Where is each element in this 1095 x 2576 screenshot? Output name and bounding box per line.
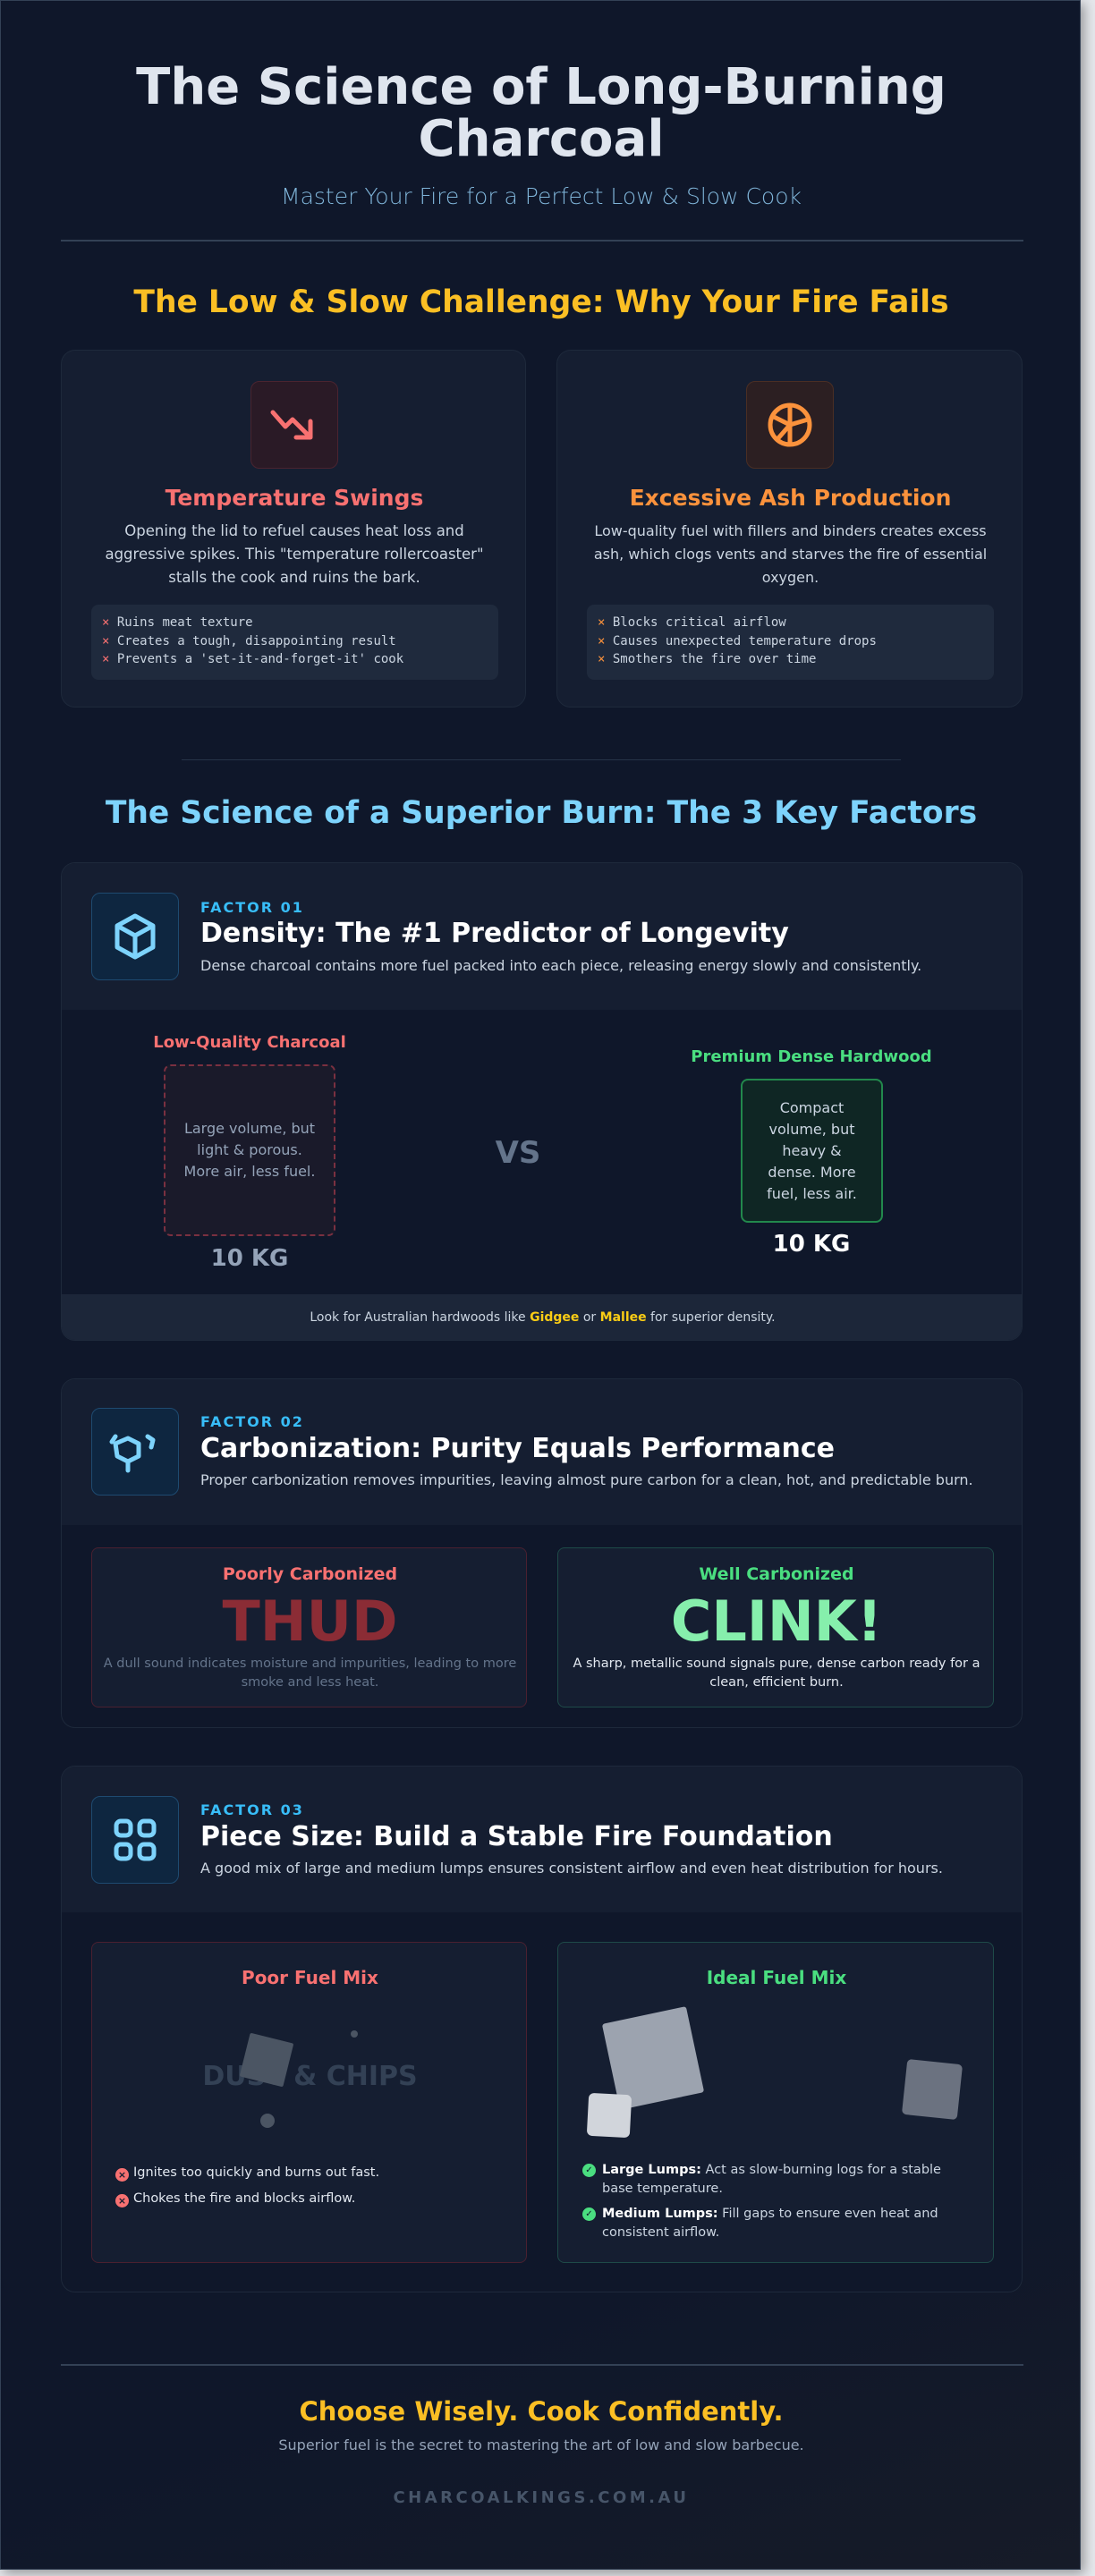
list: × Ruins meat texture xyxy=(102,615,253,630)
subtitle: Master Your Fire for a Perfect Low & Slow Cook xyxy=(281,183,802,209)
factor title: Piece Size: Build a Stable Fire Foundation xyxy=(200,1821,833,1852)
box: poor fuel mix: Poor Fuel Mix xyxy=(242,1967,378,1988)
list: ideal: Large Lumps: Act as slow-burning logs for a stable base temperature. xyxy=(602,2163,941,2196)
description: Opening the lid to refuel causes heat loss and aggressive spikes. This "temperature rollercoaster" stalls the cook and ruins the bark. xyxy=(105,522,484,586)
comparison: premium: Compact volume, but heavy & dense. More fuel, less air. xyxy=(767,1098,857,1202)
description: Low-quality fuel with fillers and binders creates excess ash, which clogs vents and starves the fire of essential oxygen. xyxy=(594,522,987,586)
comparison: low quality xyxy=(153,1033,346,1272)
factor label: FACTOR 02 xyxy=(200,1413,304,1430)
closing headline: Choose Wisely. Cook Confidently. xyxy=(300,2396,783,2427)
list: ideal: ✓ xyxy=(585,2209,593,2219)
comparison: premium: Premium Dense Hardwood xyxy=(691,1047,932,1066)
factor label: FACTOR 01 xyxy=(200,899,304,916)
closing subtext: Superior fuel is the secret to mastering the art of low and slow barbecue. xyxy=(278,2436,804,2453)
icon: cube xyxy=(91,893,179,980)
panel: temperature swings xyxy=(61,350,526,708)
list: ideal: Medium Lumps: Fill gaps to ensure even heat and consistent airflow. xyxy=(602,2207,938,2240)
icon: grid xyxy=(91,1796,179,1884)
title: The Science of Long-Burning xyxy=(136,58,946,116)
box: poorly carbonized xyxy=(91,1547,527,1707)
list: × Smothers the fire over time xyxy=(598,652,816,666)
title: Charcoal xyxy=(418,110,665,168)
list: × Creates a tough, disappointing result xyxy=(102,633,396,648)
box: ideal fuel mix: Ideal Fuel Mix xyxy=(707,1967,846,1988)
factor description: Proper carbonization removes impurities, leaving almost pure carbon for a clean, hot, and predictable burn. xyxy=(200,1471,973,1488)
list: poor: Ignites too quickly and burns out fast. xyxy=(133,2165,379,2180)
list: × Causes unexpected temperature drops xyxy=(598,633,877,648)
comparison: premium xyxy=(691,1047,932,1258)
list: poor: × xyxy=(118,2169,126,2181)
tip footer: Look for Australian hardwoods like Gidgee or Mallee for superior density. xyxy=(310,1310,776,1325)
icon: trend down xyxy=(250,381,338,469)
factor title: Density: The #1 Predictor of Longevity xyxy=(200,918,789,949)
card title: Excessive Ash Production xyxy=(630,485,951,511)
illustration: dust & chips xyxy=(202,2030,418,2128)
panel: excessive ash xyxy=(556,350,1023,708)
list xyxy=(91,605,498,680)
illustration: lumps xyxy=(587,2007,963,2138)
list: poor xyxy=(115,2165,379,2207)
list: poor: × xyxy=(118,2195,126,2207)
heading: challenge: The Low & Slow Challenge: Why Your Fire Fails xyxy=(133,284,949,320)
panel: factor 02 carbonization xyxy=(61,1378,1023,1728)
box: well carbonized: Well Carbonized xyxy=(699,1564,854,1584)
comparison: low quality: 10 KG xyxy=(211,1245,288,1272)
vs label: VS xyxy=(496,1135,540,1171)
factor description: A good mix of large and medium lumps ensures consistent airflow and even heat distribution for hours. xyxy=(200,1860,943,1877)
title xyxy=(136,58,946,168)
list xyxy=(587,605,994,680)
box: poorly carbonized: THUD xyxy=(222,1589,397,1654)
box: ideal fuel mix xyxy=(557,1942,994,2263)
panel: factor 03 piece size xyxy=(61,1766,1023,2292)
card title: Temperature Swings xyxy=(166,485,423,511)
comparison: low quality: Large volume, but light & porous. More air, less fuel. xyxy=(184,1120,315,1180)
factor label: FACTOR 03 xyxy=(200,1801,304,1818)
list: × Blocks critical airflow xyxy=(598,615,786,630)
list: × Prevents a 'set-it-and-forget-it' cook xyxy=(102,652,403,666)
box: well carbonized: CLINK! xyxy=(671,1589,882,1654)
comparison: low quality: Low-Quality Charcoal xyxy=(153,1033,346,1052)
list: ideal: ✓ xyxy=(585,2165,593,2175)
comparison: premium: 10 KG xyxy=(773,1231,850,1258)
box: poorly carbonized: A dull sound indicates moisture and impurities, leading to more smoke and less heat. xyxy=(104,1657,516,1690)
box: well carbonized: A sharp, metallic sound signals pure, dense carbon ready for a clean, efficient burn. xyxy=(573,1657,980,1690)
tip footer xyxy=(62,1294,1023,1342)
list: ideal xyxy=(582,2163,941,2240)
factor title: Carbonization: Purity Equals Performance xyxy=(200,1433,835,1464)
factor description: Dense charcoal contains more fuel packed into each piece, releasing energy slowly and consistently. xyxy=(200,957,921,974)
icon: recycle xyxy=(91,1408,179,1496)
heading: science: The Science of a Superior Burn: The 3 Key Factors xyxy=(106,795,977,831)
box: well carbonized xyxy=(557,1547,994,1707)
panel: factor 01 density xyxy=(61,862,1023,1341)
icon: grate xyxy=(746,381,834,469)
list: poor: Chokes the fire and blocks airflow. xyxy=(133,2191,355,2206)
box: poorly carbonized: Poorly Carbonized xyxy=(223,1564,397,1584)
website: CHARCOALKINGS.COM.AU xyxy=(393,2488,690,2507)
box: poor fuel mix xyxy=(91,1942,527,2263)
illustration: dust & chips: DUST & CHIPS xyxy=(202,2061,418,2092)
